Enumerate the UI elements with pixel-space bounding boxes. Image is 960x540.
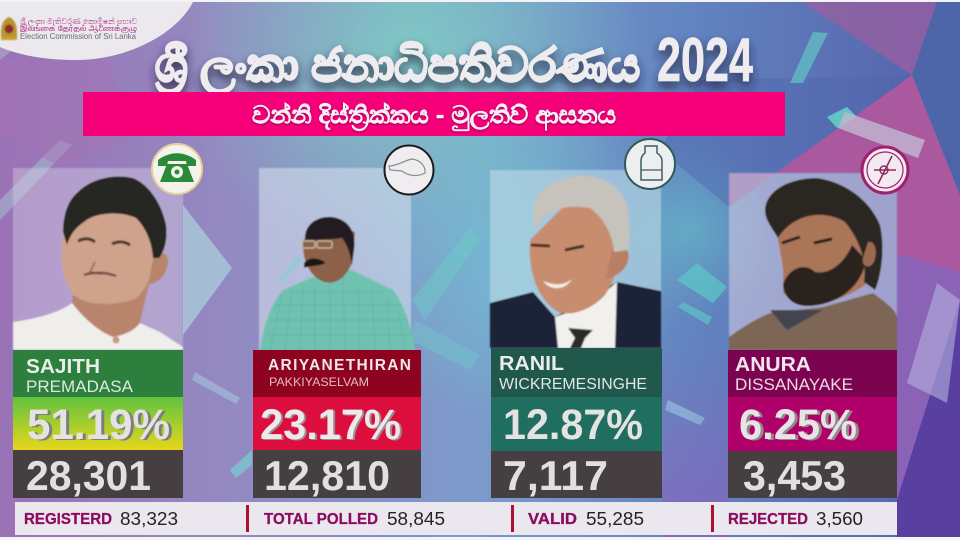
logo text: Election Commission of Sri Lanka <box>20 32 137 41</box>
percentage: 6.25% <box>742 402 860 450</box>
name: SAJITH <box>26 355 100 378</box>
icon: compass <box>862 147 908 193</box>
name: PAKKIYASELVAM <box>269 375 369 389</box>
stat: valid: 55,285 <box>586 509 644 529</box>
icon: conch shell <box>384 146 434 194</box>
votes <box>491 451 662 499</box>
icon: telephone <box>152 144 202 194</box>
name: ARIYANETHIRAN <box>268 357 411 374</box>
stat: valid <box>528 509 644 529</box>
votes: 28,301 <box>26 452 151 499</box>
photo: Sajith <box>13 168 183 350</box>
name <box>253 350 421 397</box>
name: RANIL <box>499 352 564 375</box>
icon: national emblem <box>1 17 17 40</box>
logo panel: Election Commission of Sri Lanka <box>0 2 193 60</box>
votes: 7,117 <box>503 452 608 499</box>
name: PREMADASA <box>26 378 133 396</box>
stat: valid: VALID <box>528 511 577 528</box>
stat: total polled <box>264 509 445 529</box>
candidate 1: Sajith Premadasa <box>13 144 202 499</box>
name: DISSANAYAKE <box>735 376 853 394</box>
percentage: 51.19% <box>27 401 170 449</box>
name: WICKREMESINGHE <box>499 376 647 393</box>
name <box>13 350 183 397</box>
photo: Anura <box>729 173 897 350</box>
photo: Ranil <box>490 170 661 348</box>
percentage: 23.17% <box>262 402 403 450</box>
percentage: 12.87% <box>503 401 643 449</box>
subtitle banner <box>83 92 785 136</box>
subtitle banner: වන්නි දිස්ත්‍රික්කය - මුලතිව් ආසනය <box>252 101 616 131</box>
stat: rejected <box>728 509 863 529</box>
stat: registered: REGISTERD <box>24 511 112 528</box>
title: 2024 <box>657 26 753 95</box>
candidate 2: Ariyanethiran Pakkiyaselvam <box>253 146 434 499</box>
name <box>728 350 897 397</box>
percentage: 51.19% <box>30 402 173 450</box>
stat: total polled: TOTAL POLLED <box>264 511 378 528</box>
name <box>491 348 662 397</box>
votes <box>728 451 897 499</box>
votes: 12,810 <box>264 452 390 499</box>
summary bar <box>15 502 897 535</box>
votes: 3,453 <box>743 452 846 499</box>
title <box>155 26 753 96</box>
stat: registered: 83,323 <box>120 509 178 529</box>
icon: gas cylinder <box>625 139 675 189</box>
percentage: 23.17% <box>260 401 401 449</box>
stat: rejected: 3,560 <box>816 509 863 529</box>
title: ශ්‍රී ලංකා ජනාධිපතිවරණය <box>155 38 640 96</box>
logo text: இலங்கை தேர்தல் ஆணைக்குழு <box>20 24 137 33</box>
stat: registered <box>24 509 178 529</box>
logo text <box>20 16 137 41</box>
percentage: 6.25% <box>739 401 857 449</box>
candidate 4: Anura Dissanayake <box>728 147 908 499</box>
percentage <box>728 397 897 451</box>
stat: rejected: REJECTED <box>728 511 808 528</box>
name: ANURA <box>735 353 811 376</box>
candidate 3: Ranil Wickremesinghe <box>490 139 675 499</box>
logo text: ශ්‍රී ලංකා මැතිවරණ කොමිෂන් සභාව <box>20 16 137 27</box>
stat: total polled: 58,845 <box>387 509 445 529</box>
photo: Ariyanethiran <box>259 168 415 350</box>
